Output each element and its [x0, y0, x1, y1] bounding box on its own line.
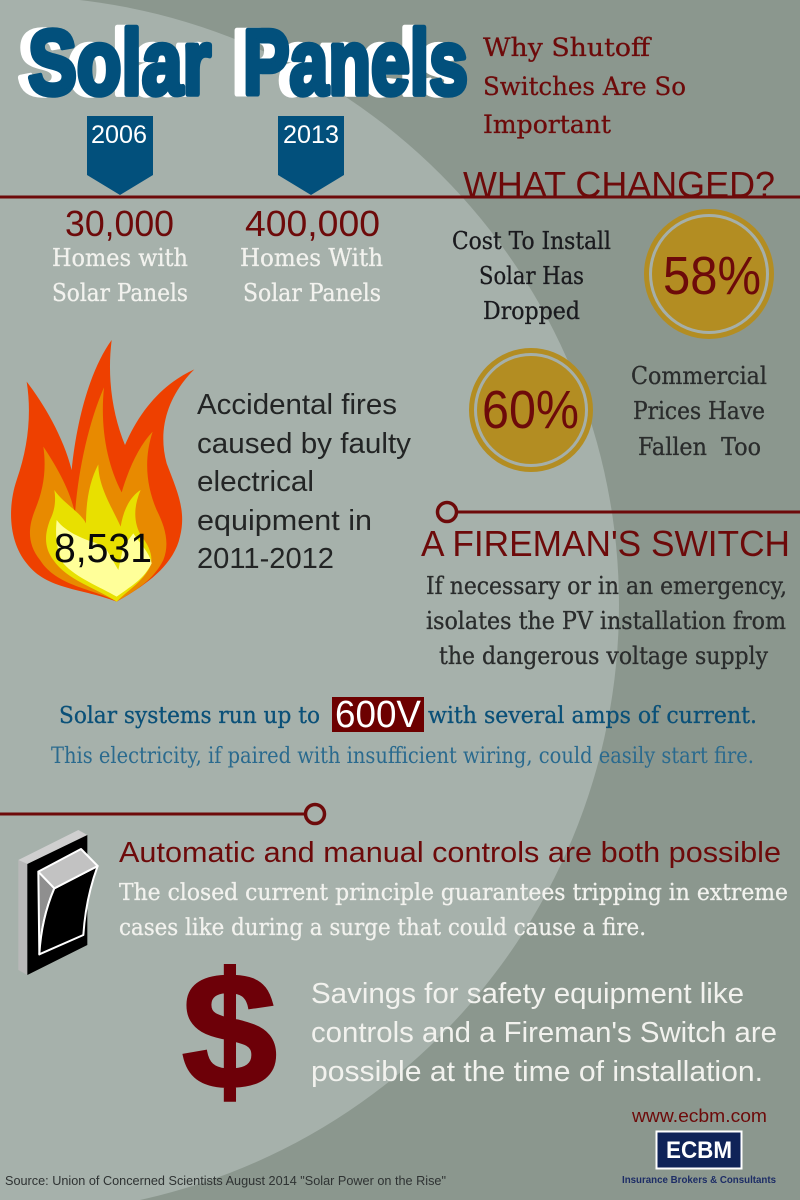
title: Panels [243, 12, 468, 114]
text: accidental fires: caused by faulty [197, 428, 412, 460]
badge: 60% [472, 350, 590, 470]
source: Source: Union of Concerned Scientists August 2014 "Solar Power on the Rise" [5, 1174, 446, 1188]
text: commercial prices: Prices Have [633, 396, 765, 425]
text: accidental fires: electrical [197, 466, 314, 498]
text: savings: Savings for safety equipment like [311, 978, 744, 1010]
text: savings [311, 978, 777, 1088]
text: savings: controls and a Fireman's Switch are [311, 1017, 777, 1049]
website: www.ecbm.com [631, 1106, 767, 1126]
text: cost to install: Solar Has [479, 261, 584, 290]
title [18, 12, 468, 114]
text: fireman's switch description: the dangerous voltage supply [439, 642, 768, 670]
text: closed current principle [119, 878, 788, 941]
stat: 2006 homes [52, 203, 188, 307]
text: savings: possible at the time of installation. [311, 1056, 763, 1088]
text: solar systems voltage [59, 694, 757, 736]
text: accidental fires: equipment in [197, 505, 372, 537]
logo: ECBM [622, 1132, 776, 1186]
icon: rocker switch [18, 830, 98, 975]
text: cost to install [452, 226, 611, 325]
badge: 58%: 58% [663, 246, 761, 306]
subtitle [483, 33, 686, 140]
stat: 2006 homes: Solar Panels [52, 279, 188, 307]
stat: 2006 homes: Homes with [52, 244, 188, 272]
text: closed current principle: cases like during a surge that could cause a fire. [119, 913, 646, 941]
text: accidental fires: 2011-2012 [197, 543, 334, 575]
icon: flame [11, 340, 194, 602]
stat: 2006 homes: 30,000 [65, 203, 174, 244]
text: cost to install: Cost To Install [452, 226, 611, 255]
marker: 2013 [278, 116, 344, 195]
subtitle: Switches Are So [483, 72, 686, 102]
text: fireman's switch description [426, 572, 787, 670]
stat: 2013 homes: 400,000 [245, 203, 380, 244]
text: cost to install: Dropped [483, 296, 580, 325]
title: Solar [18, 12, 202, 114]
badge: 60%: 60% [482, 380, 579, 440]
logo: ECBM: Insurance Brokers & Consultants [622, 1174, 776, 1186]
text: commercial prices: Fallen Too [638, 432, 761, 461]
icon: dollar sign: $ [182, 939, 277, 1123]
text: commercial prices [631, 361, 767, 461]
stat: 2013 homes: Homes With [240, 244, 383, 272]
marker: 2013: 2013 [283, 121, 339, 149]
text: solar systems voltage: 600V [335, 694, 422, 736]
timeline line [0, 196, 800, 198]
text: accidental fires: Accidental fires [197, 389, 397, 421]
text: solar systems voltage: with several amps of current. [428, 701, 757, 729]
title: Solar [28, 12, 211, 114]
flame number: 8,531 [54, 525, 152, 571]
badge: 58% [646, 212, 772, 336]
text: commercial prices: Commercial [631, 361, 767, 390]
marker: 2006 [87, 116, 153, 195]
logo: ECBM: ECBM [666, 1137, 732, 1164]
stat: 2013 homes: Solar Panels [243, 279, 381, 307]
connector: controls [0, 804, 324, 824]
text: solar systems voltage: Solar systems run up to [59, 701, 320, 729]
heading: fireman's switch: A FIREMAN'S SWITCH [421, 523, 790, 564]
heading: controls: Automatic and manual controls are both possible [119, 837, 781, 869]
text: accidental fires [197, 389, 412, 575]
subtitle: Important [483, 110, 612, 140]
subtitle: Why Shutoff [483, 33, 652, 63]
marker: 2006: 2006 [91, 121, 147, 149]
title: Panels [232, 12, 458, 114]
connector: fireman's switch [438, 502, 800, 522]
heading: what changed: WHAT CHANGED? [463, 164, 775, 205]
stat: 2013 homes [240, 203, 383, 307]
